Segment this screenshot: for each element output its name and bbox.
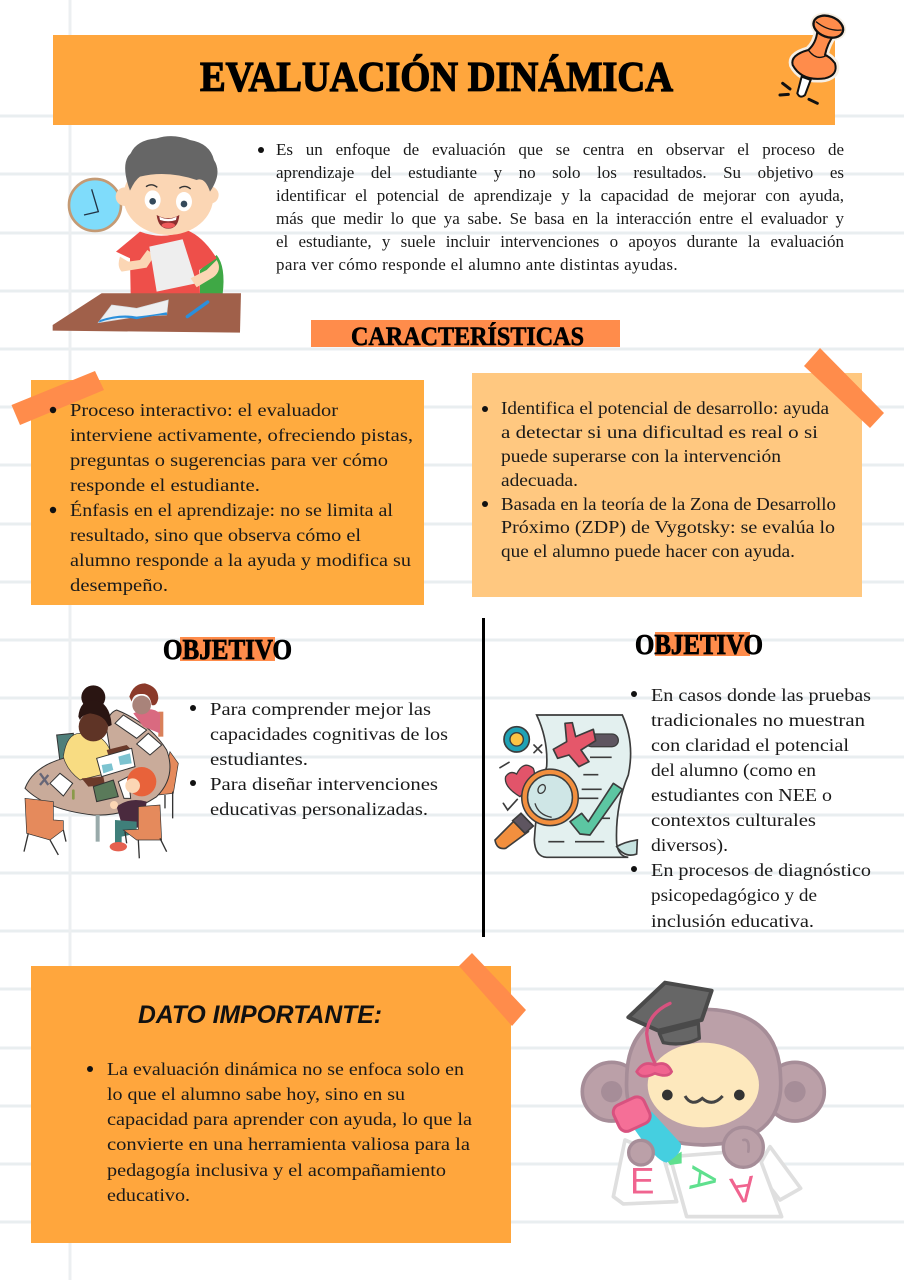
text: objetivo right: con claridad el potencial — [651, 735, 849, 755]
text: objetivo right — [631, 685, 871, 931]
text: objetivo left: capacidades cognitivas de los — [210, 724, 448, 744]
books and papers — [115, 715, 147, 738]
text: objetivo left: estudiantes. — [210, 749, 308, 769]
panel: características left: preguntas o sugerencias para ver cómo — [70, 450, 388, 470]
title: EVALUACIÓN DINÁMICA — [200, 54, 674, 101]
vertical divider — [482, 618, 485, 937]
panel: características left: resultado, sino que observa cómo el — [70, 525, 361, 545]
text: introduction: para ver cómo responde el alumno ante distintas ayudas. — [276, 255, 678, 274]
text: introduction: el estudiante, y suele incluir intervenciones o apoyos durante la evaluación — [276, 232, 844, 251]
ears and head — [582, 1009, 824, 1145]
child front — [117, 800, 147, 830]
chair left — [25, 798, 63, 840]
panel: características left: interviene activamente, ofreciendo pistas, — [70, 425, 413, 445]
text: objetivo right: psicopedagógico y de — [651, 885, 817, 905]
panel: características right: puede superarse con la intervención — [501, 446, 781, 466]
text: objetivo right: En casos donde las pruebas — [651, 685, 871, 705]
teacher — [63, 733, 112, 780]
panel: características right: Próximo (ZDP) de Vygotsky: se evalúa lo — [501, 517, 835, 538]
text: objetivo right: del alumno (como en — [651, 760, 816, 781]
text: introduction: aprendizaje del estudiante y no solo los resultados. Su objetivo es — [276, 163, 844, 182]
panel: características right: a detectar si una dificultad es real o si — [501, 422, 818, 442]
panel: características left: Énfasis en el aprendizaje: no se limita al — [70, 499, 393, 520]
heading: objetivo left: OBJETIVO — [163, 634, 292, 666]
title banner — [53, 35, 835, 125]
bullet: introduction — [258, 147, 264, 153]
panel: dato importante: La evaluación dinámica no se enfoca solo en — [107, 1059, 464, 1079]
panel: características right — [472, 348, 884, 597]
illustration: monkey with graduation cap — [582, 983, 824, 1217]
panel: características left: desempeño. — [70, 575, 168, 595]
panel: dato importante: pedagogía inclusiva y el acompañamiento — [107, 1160, 446, 1180]
text: introduction — [276, 140, 844, 274]
illustration: boy at desk with clock — [53, 136, 241, 333]
text: introduction: identificar el potencial de aprendizaje y la capacidad de mejorar con ayuda, — [276, 186, 844, 205]
text: objetivo right: estudiantes con NEE o — [651, 785, 832, 805]
paper sheets — [613, 1140, 801, 1217]
panel: características right: Identifica el potencial de desarrollo: ayuda — [501, 398, 829, 418]
text: objetivo right: inclusión educativa. — [651, 911, 814, 931]
tape — [804, 348, 884, 428]
text: objetivo right: diversos). — [651, 835, 728, 856]
chairs and table — [57, 733, 73, 762]
icon: wall clock — [69, 179, 121, 231]
heading: objetivo right: OBJETIVO — [635, 629, 763, 661]
text: objetivo left: Para diseñar intervenciones — [210, 774, 438, 794]
panel: dato importante — [31, 953, 526, 1243]
panel: dato importante: lo que el alumno sabe hoy, sino en su — [107, 1084, 405, 1104]
text: objetivo left — [190, 699, 448, 819]
panel: características right: adecuada. — [501, 470, 578, 490]
panel: dato importante: convierte en una herramienta valiosa para la — [107, 1134, 470, 1154]
icon: push pin — [780, 12, 846, 103]
graduation cap — [628, 983, 712, 1076]
heading: DATO IMPORTANTE: — [138, 1001, 382, 1029]
panel: características right: Basada en la teoría de la Zona de Desarrollo — [501, 494, 836, 514]
text: objetivo right: contextos culturales — [651, 810, 816, 830]
letters: E — [630, 1160, 654, 1201]
text: objetivo right: En procesos de diagnóstico — [651, 860, 871, 880]
tape — [12, 371, 104, 425]
panel: características left: alumno responde a la ayuda y modifica su — [70, 550, 411, 570]
desk — [53, 293, 241, 333]
tape — [459, 953, 526, 1026]
open book — [98, 300, 168, 323]
illustration: checklist with magnifying glass — [495, 715, 637, 857]
text: objetivo left: educativas personalizadas. — [210, 799, 428, 819]
panel: características left — [12, 371, 424, 605]
text: introduction: más que medir lo que ya sabe. Se basa en la interacción entre el evaluador y — [276, 209, 844, 228]
panel: características left: Proceso interactivo: el evaluador — [70, 400, 338, 420]
letters: A — [681, 1164, 725, 1194]
heading bar: características: CARACTERÍSTICAS — [351, 322, 584, 351]
child top — [133, 709, 160, 733]
illustration: teacher and children at table — [24, 683, 178, 858]
letters — [630, 1160, 758, 1212]
panel: características right: que el alumno puede hacer con ayuda. — [501, 541, 795, 561]
pencil — [187, 302, 208, 317]
panel: dato importante: educativo. — [107, 1185, 190, 1205]
panel: dato importante: capacidad para aprender con ayuda, lo que la — [107, 1109, 472, 1129]
text: introduction: Es un enfoque de evaluación que se centra en observar el proceso de — [276, 140, 844, 159]
text: objetivo left: Para comprender mejor las — [210, 699, 431, 719]
panel: características left: responde el estudiante. — [70, 475, 260, 495]
pencil — [611, 1094, 682, 1165]
text: objetivo right: tradicionales no muestran — [651, 710, 865, 730]
letters: A — [727, 1168, 758, 1212]
